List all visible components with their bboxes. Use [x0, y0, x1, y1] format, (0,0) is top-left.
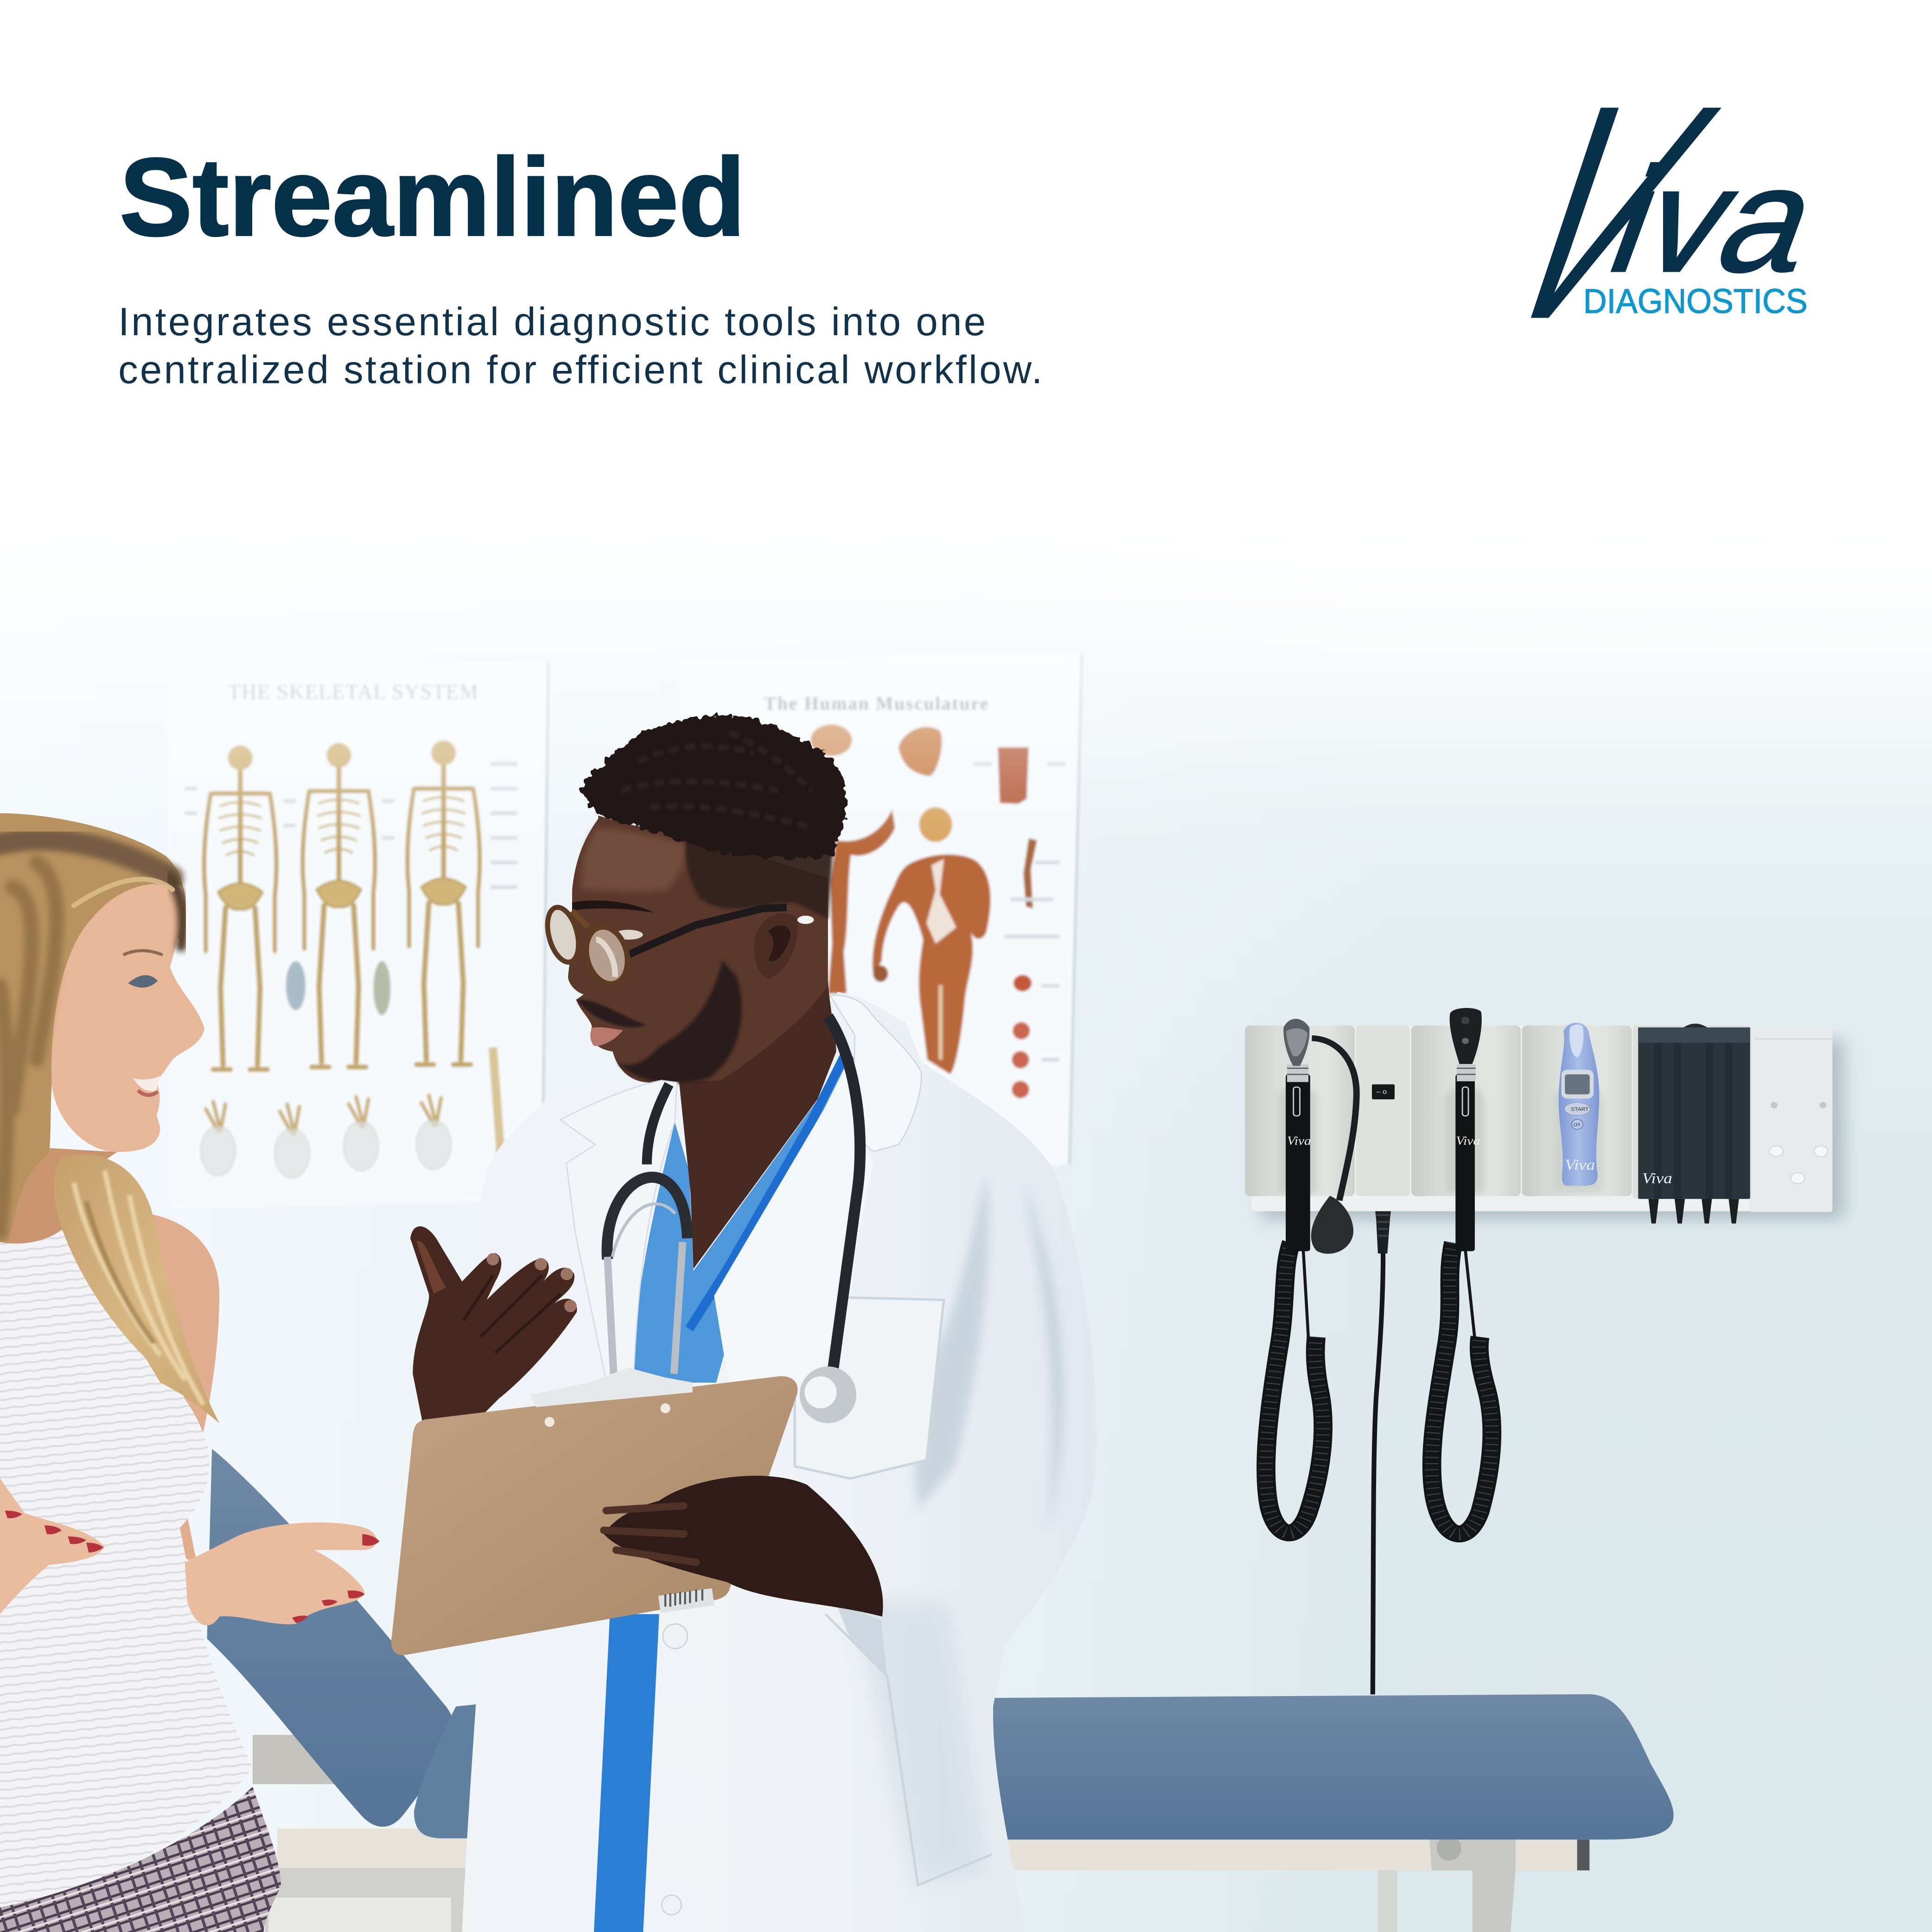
glasses: [542, 904, 814, 988]
poster: the skeletal system: [167, 662, 548, 1207]
chest piece: [800, 1366, 856, 1423]
white fade over posters: [0, 493, 1932, 850]
headline: Streamlined: Streamlined: [120, 135, 746, 259]
thermometer: Viva: [1565, 1156, 1595, 1173]
forehead highlight: [581, 828, 687, 892]
scrub band: [689, 1052, 847, 1329]
otoscope: Viva: [1287, 1134, 1311, 1148]
table backrest pad: [207, 1449, 454, 1827]
specula dispenser: [1638, 1024, 1750, 1224]
patient: [0, 813, 380, 1932]
hair strands: [0, 839, 183, 1232]
skeleton hand and foot diagrams: [201, 1096, 451, 1178]
moustache: [576, 1000, 646, 1027]
left hand: [0, 1479, 105, 1614]
coat lapel right: [714, 1060, 874, 1383]
thermometer: O/I: [1574, 1122, 1580, 1128]
table seat pad left: [414, 1703, 493, 1838]
wall-mounted diagnostic station: [1245, 1008, 1844, 1695]
description text: Integrates essential diagnostic tools into one: [118, 300, 986, 344]
logo V: V: [1441, 41, 1761, 383]
specula dispenser: Viva: [1642, 1170, 1672, 1186]
forearm and right hand: [185, 1523, 380, 1626]
head, neck and upper torso: [542, 715, 921, 1383]
face: [51, 883, 204, 1152]
doctor: [391, 715, 1097, 1932]
poster caption lines: [973, 764, 1066, 1059]
lower hand holding clipboard: [604, 1476, 883, 1617]
description text: centralized station for efficient clinical workflow.: [118, 348, 1042, 392]
stethoscope: [607, 1016, 860, 1423]
exam table: [207, 1449, 1674, 1932]
neck: [0, 1146, 117, 1254]
right mounting plate: [1749, 1027, 1832, 1212]
hair over shoulder: [54, 1154, 219, 1423]
thermometer: [1559, 1023, 1599, 1186]
lab coat: [392, 992, 1097, 1932]
face: [568, 816, 828, 1083]
raised hand: [410, 1226, 577, 1435]
fade haircut: [686, 828, 834, 919]
power cord: [1373, 1197, 1392, 1695]
thermometer: START: [1571, 1107, 1588, 1112]
coiled cord right: [1432, 1243, 1492, 1534]
coat collar and lapel left: [560, 1080, 677, 1383]
upper arm: [148, 1214, 219, 1565]
ophthalmoscope: Viva: [1456, 1134, 1480, 1148]
mounting rail: [1251, 1026, 1832, 1211]
scrub lower panel: [594, 1614, 659, 1932]
tank top: [0, 1230, 253, 1907]
logo subtitle: DIAGNOSTICS: [1583, 282, 1808, 320]
nails: [292, 1534, 380, 1623]
poster title: The Human Musculature: [764, 693, 988, 714]
plaid shorts: [0, 1786, 281, 1932]
Viva Diagnostics logo: [1441, 41, 1843, 383]
scrub top: [629, 1047, 855, 1383]
specula tips: [1648, 1199, 1739, 1224]
coat pocket: [795, 1296, 944, 1479]
ear: [754, 913, 798, 979]
muscle figures: [810, 724, 1037, 1098]
device shadow: [1261, 1039, 1844, 1220]
coiled cord left: [1266, 1243, 1323, 1533]
coat shading: [835, 1171, 1064, 1885]
hair texture: [621, 733, 811, 828]
fingertips: [487, 1253, 577, 1312]
poster caption lines: [185, 764, 517, 887]
eye and brow: [572, 900, 654, 940]
white modules: [1245, 1026, 1751, 1199]
clip and paper: [530, 1368, 693, 1407]
poster title: THE SKELETAL SYSTEM: [228, 680, 478, 703]
clipboard: [391, 1368, 797, 1655]
power switch: – o: [1376, 1088, 1387, 1096]
otoscope: [1283, 1019, 1357, 1254]
lower pocket and buttons: [662, 1614, 992, 1915]
lips: [590, 1027, 623, 1046]
hair back: [0, 813, 185, 1269]
neck: [679, 981, 836, 1269]
coat collar right: [830, 995, 921, 1152]
table frame: [253, 1735, 1589, 1932]
poster: the human musculature: [680, 653, 1082, 1171]
logo iva: iva: [1590, 136, 1843, 303]
skeleton figures: [204, 740, 502, 1164]
table seat pad right: [993, 1694, 1674, 1840]
beard: [616, 960, 742, 1084]
facial features: [123, 950, 163, 1095]
power switch: [1372, 1084, 1395, 1099]
hair: [582, 715, 847, 859]
ophthalmoscope: [1450, 1008, 1482, 1251]
barcode label: [658, 1588, 714, 1613]
